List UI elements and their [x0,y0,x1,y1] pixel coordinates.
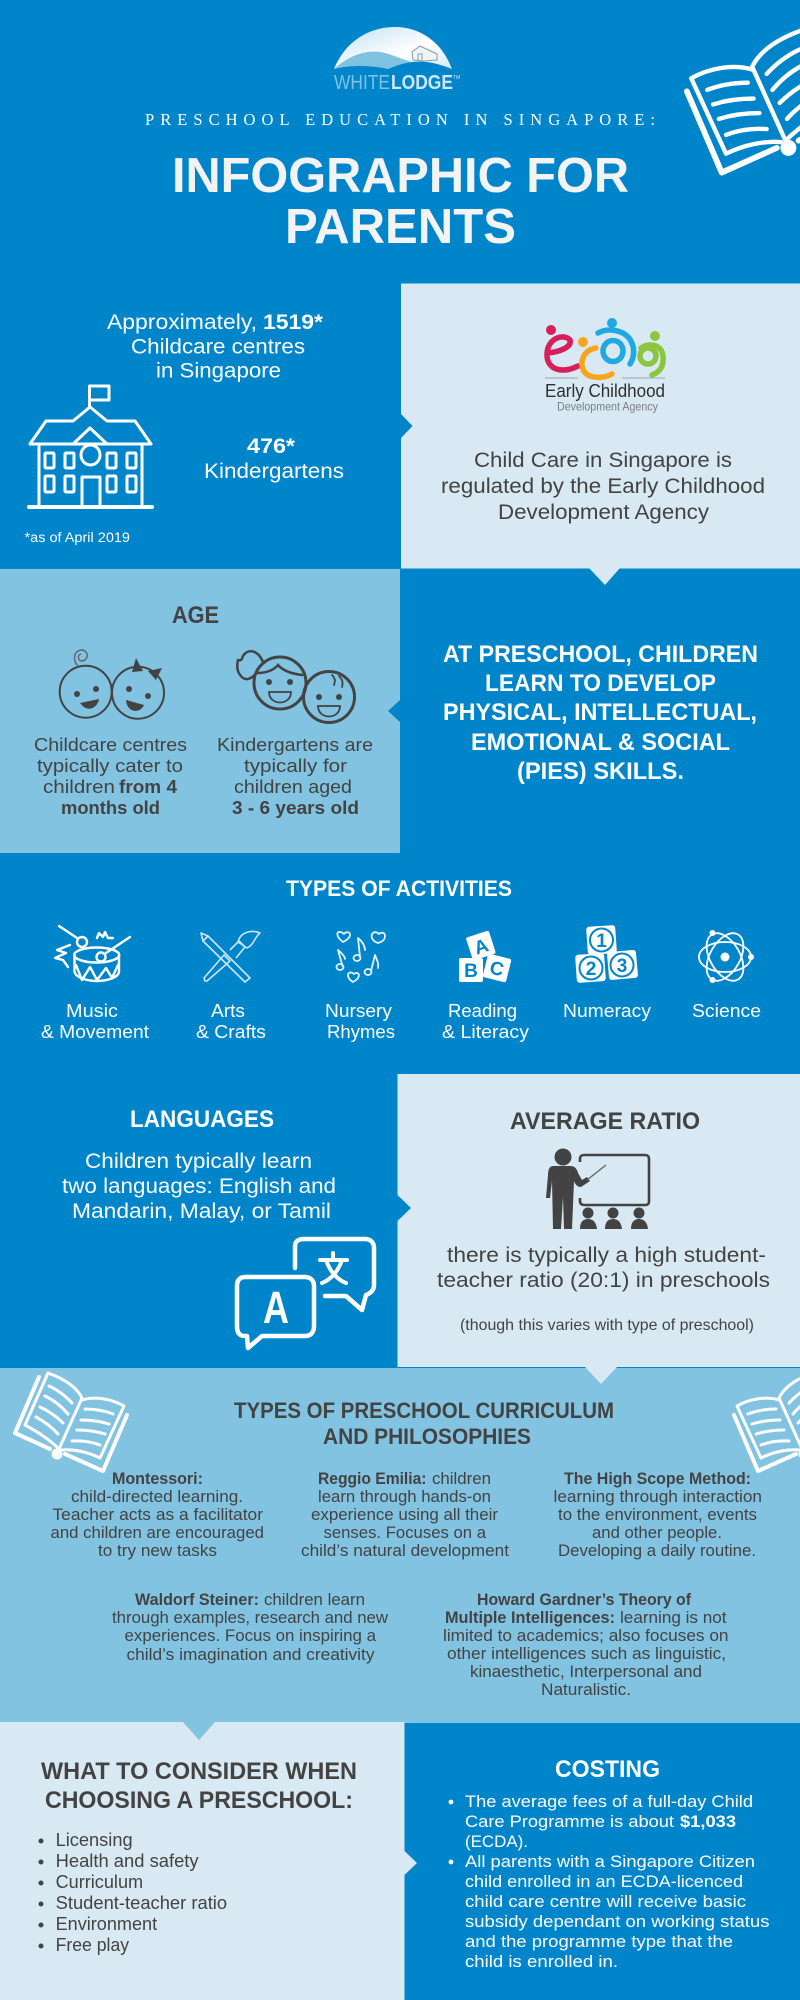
activity: numeracy [563,925,652,1021]
text: Reggio Emilia [301,1470,509,1560]
arrow: pointing to costing [404,1851,417,1875]
icon: pencil and brush [201,931,260,982]
icon: two babies [60,650,164,719]
icon: 123 blocks: 3 [617,956,627,977]
text: kindergarten ages: 3 - 6 years old [232,797,359,818]
text: Howard Gardner: learning is not [620,1609,727,1627]
panel: PIES skills statement: PHYSICAL, INTELLECTUAL, [443,699,757,726]
text: kindergarten ages: typically for [244,755,347,776]
heading: languages: LANGUAGES [130,1106,274,1133]
heading: curriculum: AND PHILOSOPHIES [323,1424,531,1449]
heading: what to consider [41,1758,357,1814]
list: costing points: Care Programme is about [465,1812,674,1831]
heading: age: AGE [172,602,219,629]
text: childcare ages: children [43,776,115,797]
list: costing points: child is enrolled in. [465,1952,618,1971]
logo: ECDA: Development Agency [557,400,658,414]
text: Waldorf Steiner [112,1591,388,1664]
text: regulation statement [441,448,765,524]
icon: translation speech bubbles [237,1239,374,1348]
text: childcare centres count: Approximately, [107,310,257,334]
text: Howard Gardner: limited to academics; also focuses on [443,1627,728,1645]
icon: ABC blocks: B [464,961,478,982]
panel: PIES skills statement: AT PRESCHOOL, CHILDREN [443,641,758,668]
text: childcare centres count: Childcare centres [131,334,305,358]
text: Montessori: and children are encouraged [50,1524,264,1542]
activity: arts and crafts [196,931,266,1042]
panel: PIES skills statement: (PIES) SKILLS. [517,758,684,785]
heading: what to consider: WHAT TO CONSIDER WHEN [41,1758,357,1785]
panel: types of activities [41,876,761,1042]
activity: arts and crafts: & Crafts [196,1021,266,1042]
text: childcare ages: Childcare centres [34,734,187,755]
panel: languages [62,1106,374,1348]
text: regulation statement: Development Agency [498,500,709,524]
arrow: pointing into age panel [388,700,400,722]
text: Waldorf Steiner: children learn [264,1591,365,1609]
text: Reggio Emilia: learn through hands-on [318,1488,491,1506]
icon: open book left [15,1373,127,1471]
heading: average ratio: AVERAGE RATIO [510,1108,700,1135]
list: considerations: Curriculum [56,1871,143,1892]
activity: science: Science [692,1000,761,1021]
text: childcare ages: typically cater to [37,755,183,776]
activity: music and movement: Music [66,1000,118,1021]
arrow: ECDA panel pointing down [589,568,620,585]
panel: centre counts [24,310,344,545]
text: regulation statement: Child Care in Singapore is [474,448,732,472]
text: Reggio Emilia: experience using all their [311,1506,499,1524]
activity: numeracy: Numeracy [563,1000,652,1021]
text: Reggio Emilia: senses. Focuses on a [324,1524,487,1542]
icon: notes and hearts [336,932,385,982]
text: childcare ages [34,734,187,818]
activity: nursery rhymes: Rhymes [327,1021,395,1042]
arrow: curriculum panel pointing down [183,1722,215,1740]
text: childcare centres count: 1519* [263,310,324,334]
text: Reggio Emilia: child’s natural development [301,1542,509,1560]
panel: PIES skills statement: LEARN TO DEVELOP [485,670,716,697]
icon: open book top right [687,30,800,173]
logo: White Lodge: LODGE [391,72,453,94]
text: Howard Gardner: kinaesthetic, Interpersonal and [470,1663,702,1681]
list: considerations: Environment [56,1913,157,1934]
text: student-teacher ratio [437,1243,770,1292]
text: kindergarten ages [217,734,373,818]
heading: costing: COSTING [555,1756,660,1783]
title: PARENTS [285,200,516,254]
list: costing points: (ECDA). [465,1832,528,1851]
icon: 123 blocks: 2 [586,959,596,980]
title [172,149,629,254]
text: High Scope Method [554,1470,762,1560]
activity: nursery rhymes: Nursery [325,1000,393,1021]
text: childcare centres count: in Singapore [156,358,281,382]
activity: reading and literacy: Reading [448,1000,517,1021]
logo: ECDA [545,318,665,414]
text: languages description: two languages: English and [62,1174,336,1198]
activity: music and movement [41,926,149,1042]
logo: ECDA: Early Childhood [545,381,665,401]
list: considerations [38,1829,227,1955]
panel: curriculum and philosophies [0,1368,800,1723]
panel: ECDA regulator [401,284,800,568]
icon: ABC blocks [459,930,512,983]
heading: curriculum [234,1398,614,1449]
text: Montessori: Teacher acts as a facilitator [52,1506,264,1524]
arrow: pointing into ratio panel [398,1195,411,1221]
text: Reggio Emilia: children [432,1470,491,1488]
text: Howard Gardner: Howard Gardner’s Theory of [477,1591,692,1609]
icon: 123 blocks [575,925,638,983]
text: Waldorf Steiner: Waldorf Steiner: [135,1591,259,1609]
text: Waldorf Steiner: child’s imagination and creativity [126,1646,375,1664]
list: costing points [449,1792,770,1971]
text: Montessori: child-directed learning. [71,1488,243,1506]
footnote: *as of April 2019 [24,530,130,545]
logo: White Lodge: WHITE [334,72,390,94]
list: considerations: Licensing [56,1829,133,1850]
panel: what to consider [0,1722,417,2000]
panel: age [0,569,400,853]
activity: music and movement: & Movement [41,1021,149,1042]
activity: arts and crafts: Arts [211,1000,245,1021]
text: Waldorf Steiner: experiences. Focus on inspiring a [124,1627,377,1645]
list: considerations: Free play [56,1934,130,1955]
activity: reading and literacy [442,930,530,1042]
list: costing points: subsidy dependant on working status [465,1912,770,1931]
icon: translation speech bubbles: A [263,1282,289,1333]
heading: what to consider: CHOOSING A PRESCHOOL: [45,1787,353,1814]
text: Reggio Emilia: Reggio Emilia: [318,1470,426,1488]
icon: drum [55,926,130,981]
text: childcare ages: months old [61,797,160,818]
text: kindergarten ages: children aged [234,776,352,797]
list: considerations: Student-teacher ratio [56,1892,227,1913]
text: Howard Gardner: Multiple Intelligences: [445,1609,615,1627]
list: costing points: The average fees of a full-day Child [465,1792,753,1811]
text: kindergarten ages: Kindergartens are [217,734,373,755]
text: Montessori: Montessori: [112,1470,203,1488]
arrow: ratio panel pointing down [585,1367,617,1384]
logo: White Lodge [334,27,460,94]
activity: reading and literacy: & Literacy [442,1021,530,1042]
heading: curriculum: TYPES OF PRESCHOOL CURRICULUM [234,1398,614,1423]
icon: school building [29,386,152,507]
header [145,27,800,254]
icon: ABC blocks: C [487,958,506,981]
title: INFOGRAPHIC FOR [172,149,629,203]
panel: PIES skills statement [443,641,758,785]
activity: science [692,927,761,1021]
list: considerations: Health and safety [56,1850,199,1871]
text: kindergartens count: 476* [247,434,296,458]
text: Montessori: to try new tasks [98,1542,217,1560]
text: High Scope Method: and other people. [592,1524,722,1542]
text: Howard Gardner: other intelligences such as linguistic, [447,1645,726,1663]
panel: costing [404,1723,800,2000]
text: Waldorf Steiner: through examples, research and new [112,1609,388,1627]
icon: atom [699,927,754,987]
logo: White Lodge: TM [453,75,460,81]
text: student-teacher ratio: there is typically a high student- [447,1243,766,1267]
list: costing points: and the programme type that the [465,1932,733,1951]
text: kindergartens count: Kindergartens [204,459,344,483]
text: High Scope Method: The High Scope Method: [564,1470,751,1488]
panel: average ratio [398,1074,800,1367]
activity: nursery rhymes [325,932,395,1042]
icon: 123 blocks: 1 [596,931,607,952]
text: kindergartens count [204,434,344,483]
list: costing points: child care centre will receive basic [465,1892,747,1911]
text: High Scope Method: to the environment, events [558,1506,757,1524]
text: High Scope Method: learning through interaction [554,1488,762,1506]
icon: girl and boy [237,651,354,722]
text: childcare centres count [107,310,324,382]
subtitle: PRESCHOOL EDUCATION IN SINGAPORE: [145,110,655,129]
text: regulation statement: regulated by the Early Childhood [441,474,765,498]
text: languages description: Children typically learn [85,1149,312,1173]
list: costing points: $1,033 [680,1812,736,1831]
text: High Scope Method: Developing a daily routine. [558,1542,756,1560]
text: languages description [62,1149,336,1223]
note: ratio varies: (though this varies with type of preschool) [460,1317,754,1334]
panel: PIES skills statement: EMOTIONAL & SOCIAL [471,729,730,756]
list: costing points: All parents with a Singapore Citizen [465,1852,755,1871]
icon: open book right [734,1373,800,1471]
text: Montessori [50,1470,264,1560]
list: costing points: child enrolled in an ECDA-licenced [465,1872,743,1891]
icon: ABC blocks: A [472,935,491,960]
arrow: pointing into ECDA panel [401,414,412,438]
text: languages description: Mandarin, Malay, or Tamil [72,1199,331,1223]
heading: types of activities: TYPES OF ACTIVITIES [286,876,512,901]
text: Howard Gardner [443,1591,728,1699]
text: student-teacher ratio: teacher ratio (20:1) in preschools [437,1268,770,1292]
text: childcare ages: from 4 [119,776,178,797]
text: Howard Gardner: Naturalistic. [541,1681,631,1699]
icon: teacher at board with students [546,1148,649,1229]
